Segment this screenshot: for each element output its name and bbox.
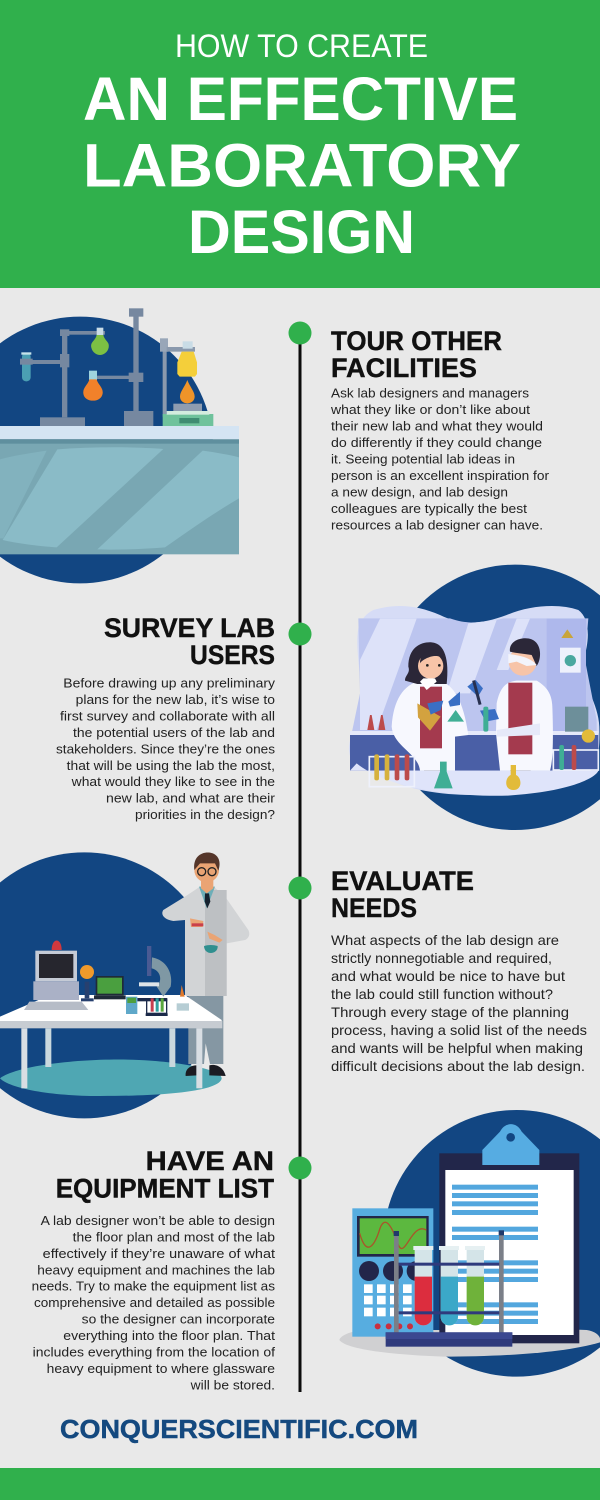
illustration: lab bench with flasks bbox=[0, 308, 239, 583]
title: DESIGN bbox=[188, 198, 415, 266]
body text bbox=[56, 676, 276, 822]
body text: Before drawing up any preliminary bbox=[63, 676, 276, 690]
body text: what would they like to see in the bbox=[71, 774, 275, 789]
microscope bbox=[137, 946, 171, 1001]
body text: A lab designer won’t be able to design bbox=[41, 1213, 275, 1228]
section 2 text bbox=[56, 613, 276, 822]
body text: strictly nonnegotiable and required, bbox=[331, 951, 552, 966]
scientist figure bbox=[162, 853, 249, 1076]
section 4 text bbox=[32, 1146, 276, 1392]
header banner bbox=[0, 0, 600, 288]
title: HOW TO CREATE bbox=[175, 28, 428, 64]
body text: the potential users of the lab and bbox=[73, 725, 275, 740]
body text: process, having a solid list of the needs bbox=[331, 1023, 587, 1038]
heading: survey lab users bbox=[104, 613, 275, 670]
timeline bbox=[288, 322, 312, 1392]
body text: includes everything from the location of bbox=[33, 1344, 275, 1360]
oscilloscope bbox=[352, 1208, 433, 1337]
heading: tour other facilities bbox=[331, 326, 502, 383]
heading: have an equipment list bbox=[56, 1146, 274, 1204]
body text: person is an excellent inspiration for bbox=[331, 468, 550, 483]
website url: CONQUERSCIENTIFIC.COM bbox=[60, 1414, 418, 1444]
body text: so the designer can incorporate bbox=[82, 1312, 275, 1327]
test tube rack bbox=[386, 1230, 512, 1347]
heading: evaluate needs bbox=[331, 866, 474, 923]
heading: survey lab users: SURVEY LAB bbox=[104, 613, 275, 643]
heading: have an equipment list: HAVE AN bbox=[146, 1146, 274, 1176]
heading: have an equipment list: EQUIPMENT LIST bbox=[56, 1174, 274, 1204]
body text bbox=[32, 1213, 276, 1392]
title: AN EFFECTIVE bbox=[83, 65, 518, 133]
body text: stakeholders. Since they’re the ones bbox=[56, 741, 276, 756]
body text: everything into the floor plan. That bbox=[63, 1328, 275, 1343]
title: LABORATORY bbox=[83, 132, 521, 200]
body text: and what would be nice to have but bbox=[331, 969, 565, 984]
man scientist bbox=[467, 638, 553, 771]
body text: do differently if they could change bbox=[331, 435, 542, 450]
body text: Ask lab designers and managers bbox=[331, 386, 530, 400]
body text: their new lab and what they would bbox=[331, 418, 543, 434]
body text: priorities in the design? bbox=[135, 807, 275, 822]
body text: what they like or don’t like about bbox=[330, 402, 530, 417]
section 3 text bbox=[331, 866, 587, 1074]
body text: and wants will be helpful when making bbox=[331, 1041, 583, 1056]
heading: evaluate needs: EVALUATE bbox=[331, 866, 474, 896]
body text: heavy equipment to where glassware bbox=[47, 1361, 275, 1376]
body text bbox=[331, 933, 587, 1074]
heading: tour other facilities: TOUR OTHER bbox=[331, 326, 502, 356]
body text: will be stored. bbox=[190, 1377, 275, 1392]
computer bbox=[24, 940, 88, 1010]
desk bbox=[0, 995, 222, 1088]
footer band bbox=[0, 1468, 600, 1500]
section 1 text bbox=[330, 326, 550, 532]
body text: plans for the new lab, it’s wise to bbox=[76, 692, 275, 707]
clipboard bbox=[439, 1124, 579, 1343]
body text: first survey and collaborate with all bbox=[60, 708, 275, 723]
bulb and monitor bbox=[80, 965, 126, 1001]
illustration: two scientists bbox=[349, 565, 600, 830]
body text: difficult decisions about the lab design. bbox=[331, 1059, 585, 1074]
body text: effectively if they’re unaware of what bbox=[43, 1246, 275, 1261]
body text: What aspects of the lab design are bbox=[331, 933, 559, 948]
body text bbox=[330, 386, 550, 532]
body text: resources a lab designer can have. bbox=[331, 518, 543, 532]
body text: heavy equipment and machines the lab bbox=[37, 1262, 275, 1277]
illustration: clipboard and test tubes bbox=[339, 1110, 600, 1377]
illustration: scientist at desk bbox=[0, 852, 249, 1118]
body text: new lab, and what are their bbox=[106, 791, 276, 806]
body text: needs. Try to make the equipment list as bbox=[32, 1279, 276, 1294]
body text: it. Seeing potential lab ideas in bbox=[331, 452, 515, 466]
title bbox=[83, 28, 521, 266]
heading: tour other facilities: FACILITIES bbox=[331, 353, 477, 383]
body text: colleagues are typically the best bbox=[331, 501, 527, 516]
body text: Through every stage of the planning bbox=[331, 1005, 569, 1020]
body text: that will be using the lab the most, bbox=[67, 758, 275, 773]
heading: evaluate needs: NEEDS bbox=[331, 893, 417, 923]
body text: a new design, and lab design bbox=[331, 484, 508, 500]
body text: comprehensive and detailed as possible bbox=[34, 1295, 275, 1310]
heading: survey lab users: USERS bbox=[190, 640, 275, 670]
body text: the floor plan and most of the lab bbox=[73, 1229, 275, 1244]
body text: the lab could still function without? bbox=[331, 987, 553, 1002]
woman scientist bbox=[392, 642, 468, 771]
